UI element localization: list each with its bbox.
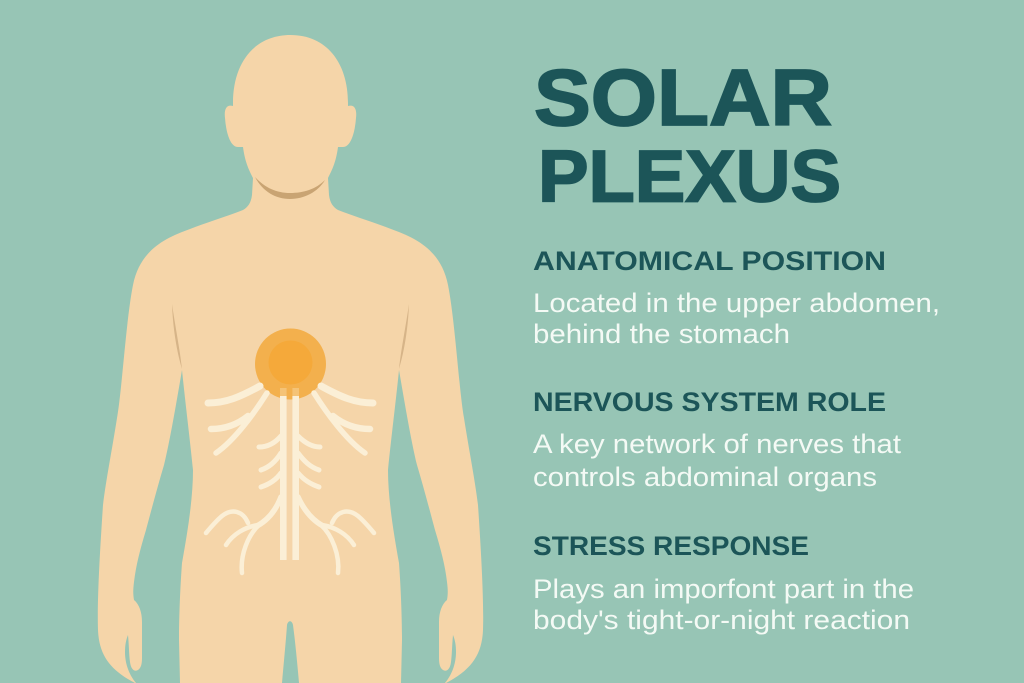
section: nervous system role [533, 387, 902, 492]
left nerve branches [206, 386, 281, 573]
left torso crease [172, 304, 182, 369]
title [534, 53, 841, 218]
right nerve branches [298, 386, 374, 573]
nerve network [206, 386, 374, 573]
body text: stress response: Plays an imporfont part in the [533, 574, 914, 604]
title: PLEXUS [538, 136, 841, 218]
human body figure [98, 35, 483, 683]
heading: nervous system role: NERVOUS SYSTEM ROLE [533, 387, 886, 417]
section: anatomical position [533, 246, 940, 349]
body silhouette [98, 35, 483, 683]
heading: anatomical position: ANATOMICAL POSITION [533, 246, 886, 276]
heading: stress response: STRESS RESPONSE [533, 531, 809, 561]
right torso crease [399, 304, 409, 369]
body text: anatomical position: Located in the upper abdomen, [533, 288, 940, 318]
section: stress response [533, 531, 914, 635]
title: SOLAR [534, 53, 832, 142]
solar plexus glowing circle [255, 328, 326, 400]
body text: nervous system role: A key network of nerves that [533, 429, 902, 459]
body text: stress response [533, 574, 914, 635]
body text: stress response: body's tight-or-night reaction [533, 605, 910, 635]
chin shadow [255, 177, 325, 199]
body text: nervous system role: controls abdominal organs [533, 462, 877, 492]
spine nerve lines [283, 388, 296, 560]
body text: nervous system role [533, 429, 902, 492]
body text: anatomical position [533, 288, 940, 349]
body text: anatomical position: behind the stomach [533, 319, 790, 349]
